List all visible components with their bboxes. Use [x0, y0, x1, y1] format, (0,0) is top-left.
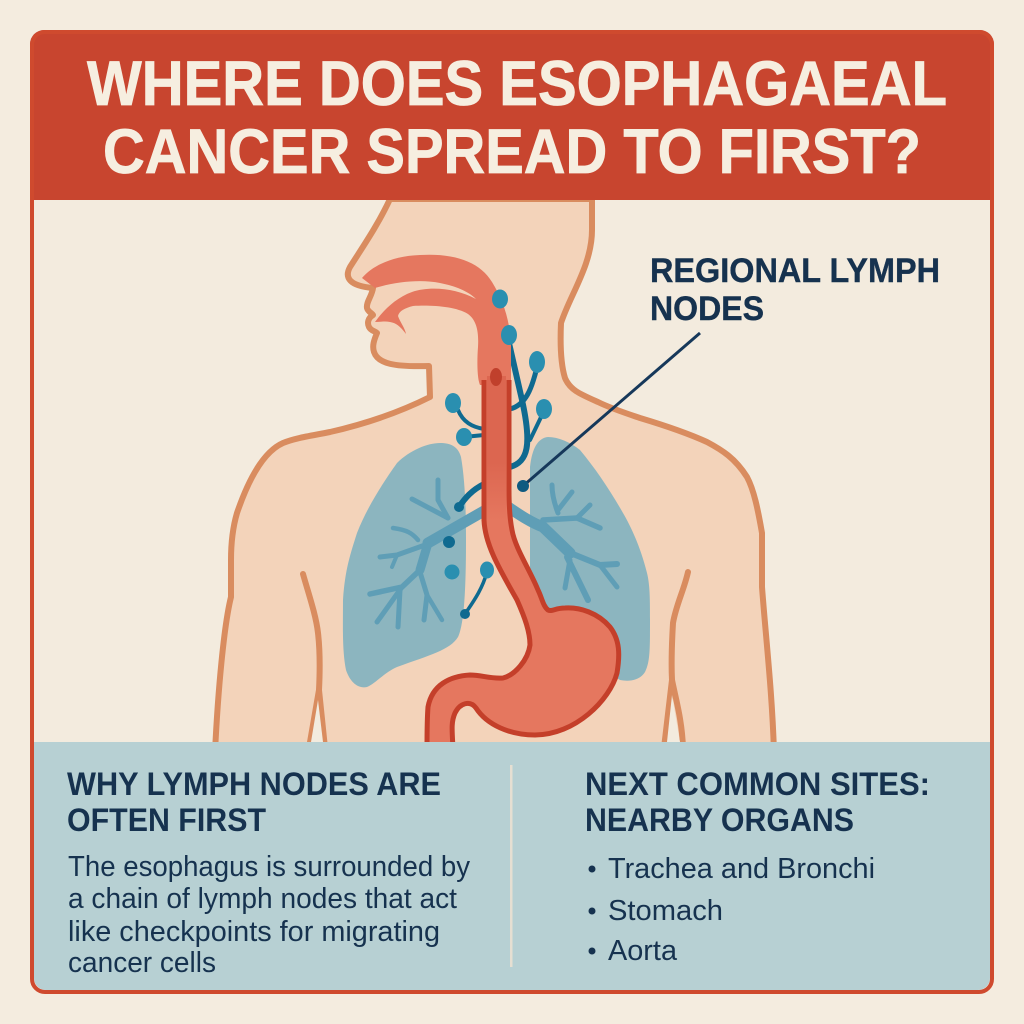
body text: like checkpoints for migrating [68, 916, 440, 948]
callout: regional lymph nodes label [650, 252, 940, 328]
esophagus and stomach [427, 380, 619, 748]
heading: why lymph nodes [67, 766, 441, 838]
right lung [530, 437, 650, 681]
panel: illustration background [32, 198, 992, 748]
figure: upper body anatomy [215, 199, 774, 752]
left lung [343, 443, 466, 687]
panel: bottom information [34, 742, 990, 990]
callout: leader line [517, 333, 700, 492]
bullet list: Trachea and Bronchi [608, 853, 875, 885]
lymph nodes [443, 290, 552, 619]
esophagus tube [487, 376, 506, 520]
heading: why lymph nodes: OFTEN FIRST [67, 802, 266, 838]
gaps between arm and torso [311, 700, 323, 742]
title: CANCER SPREAD TO FIRST? [103, 117, 921, 187]
text block: why lymph nodes [67, 766, 471, 979]
bronchial tree: right [508, 485, 617, 600]
bullet list: Stomach [608, 895, 723, 927]
bullet list [588, 853, 875, 967]
callout: regional lymph nodes label: NODES [650, 290, 764, 328]
heading: why lymph nodes: WHY LYMPH NODES ARE [67, 766, 441, 802]
right arm line [664, 572, 688, 748]
pharynx and airway [362, 255, 511, 385]
body text: The esophagus is surrounded by [68, 851, 471, 883]
left arm line [303, 574, 325, 748]
header banner [30, 30, 994, 200]
text block: next common sites [585, 766, 930, 967]
callout: regional lymph nodes label: REGIONAL LYMPH [650, 252, 940, 290]
heading: next common sites: NEXT COMMON SITES: [585, 766, 930, 802]
heading: next common sites [585, 766, 930, 838]
body silhouette [215, 199, 774, 752]
bullet list: Aorta [608, 935, 677, 967]
body text: cancer cells [68, 947, 216, 979]
heading: next common sites: NEARBY ORGANS [585, 802, 854, 838]
tumor [490, 368, 502, 386]
title [87, 49, 947, 187]
body text: a chain of lymph nodes that act [68, 883, 457, 915]
bronchial tree: left [370, 480, 484, 627]
lymph vessels [458, 343, 543, 614]
body text [68, 851, 471, 979]
title: WHERE DOES ESOPHAGAEAL [87, 49, 947, 119]
